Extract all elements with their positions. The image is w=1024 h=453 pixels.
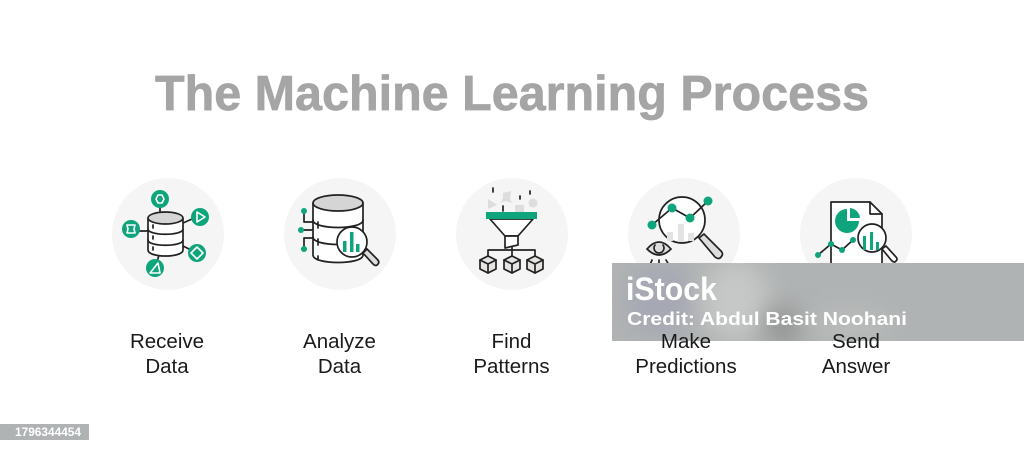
image id tag: 1796344454 bbox=[15, 427, 82, 439]
label: find patterns: Find bbox=[492, 330, 531, 353]
pie chart bbox=[835, 208, 860, 233]
funnel bbox=[486, 212, 537, 248]
green nodes bbox=[122, 190, 209, 277]
magnifier bbox=[659, 197, 722, 258]
magnifier with bars bbox=[337, 227, 379, 266]
falling shapes bbox=[488, 188, 538, 212]
eye bbox=[647, 242, 671, 266]
database cylinder bbox=[148, 212, 183, 256]
magnifier bbox=[858, 224, 897, 262]
icon: receive data bbox=[112, 178, 224, 290]
label: find patterns: Patterns bbox=[473, 355, 550, 378]
label: analyze data: Analyze bbox=[303, 330, 376, 353]
label: analyze data: Data bbox=[318, 355, 362, 378]
document bbox=[831, 202, 882, 265]
icon: analyze data bbox=[284, 178, 396, 290]
database cylinder bbox=[313, 195, 363, 262]
watermark logo: iStock bbox=[626, 271, 717, 307]
label: send answer: Answer bbox=[822, 355, 890, 378]
label: send answer: Send bbox=[832, 330, 880, 353]
label: receive data: Data bbox=[145, 355, 189, 378]
cubes bbox=[480, 256, 543, 273]
watermark band bbox=[612, 260, 1024, 346]
output tree bbox=[488, 247, 535, 257]
trend line bbox=[815, 237, 856, 258]
watermark credit: Credit: Abdul Basit Noohani bbox=[627, 309, 907, 329]
icon: find patterns bbox=[456, 178, 568, 290]
icon: send answer bbox=[800, 178, 912, 290]
trend line bbox=[648, 196, 712, 230]
title: The Machine Learning Process bbox=[155, 67, 869, 121]
label: make predictions: Predictions bbox=[635, 355, 737, 378]
label: make predictions: Make bbox=[661, 330, 711, 353]
image id tag bbox=[0, 424, 89, 440]
connector dots bbox=[298, 208, 313, 252]
label: receive data: Receive bbox=[130, 330, 204, 353]
icon: make predictions bbox=[628, 178, 740, 290]
